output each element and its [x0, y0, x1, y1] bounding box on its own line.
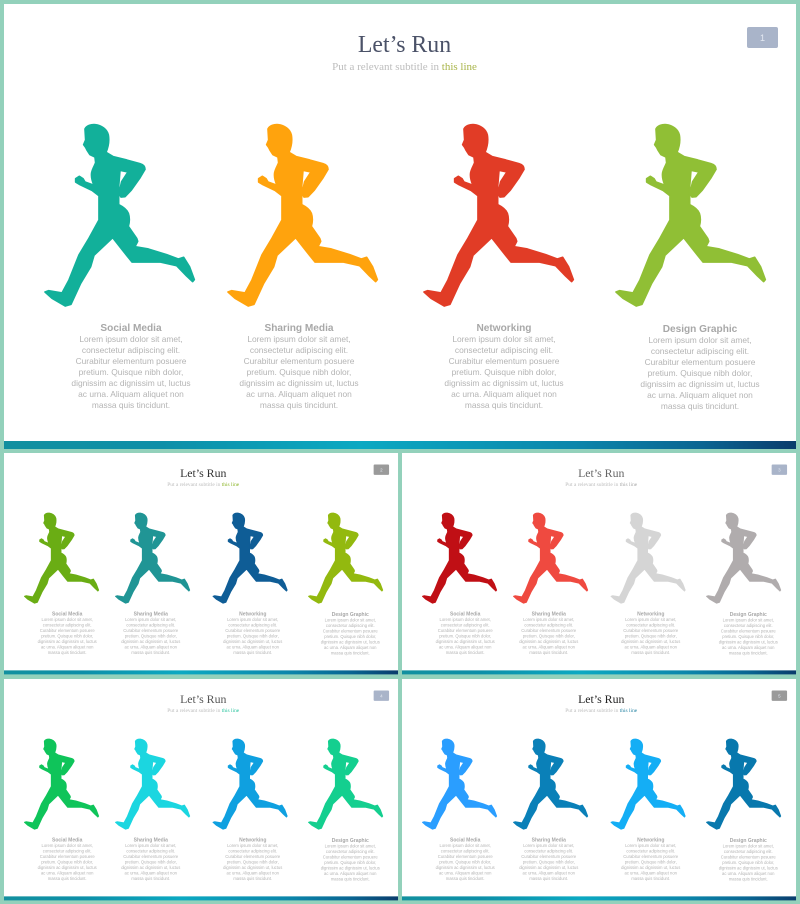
column: design graphic: Curabitur elementum posuere [721, 629, 776, 634]
column: social media: dignissim ac dignissim ut, luctus [436, 865, 495, 870]
column: sharing media: ac urna. Aliquam aliquet non [125, 645, 178, 650]
column: design graphic: Curabitur elementum posuere [323, 855, 378, 860]
column: design graphic: massa quis tincidunt. [661, 401, 739, 411]
column: sharing media: dignissim ac dignissim ut, luctus [519, 639, 578, 644]
column: sharing media: dignissim ac dignissim ut, luctus [121, 865, 180, 870]
column: design graphic: massa quis tincidunt. [729, 876, 768, 881]
column: networking: Lorem ipsum dolor sit amet, [452, 334, 556, 344]
column: networking: pretium. Quisque nibh dolor, [625, 860, 677, 865]
column: sharing media: massa quis tincidunt. [529, 650, 568, 655]
column: networking: consectetur adipiscing elit. [228, 849, 277, 854]
column: social media: massa quis tincidunt. [446, 876, 485, 881]
column: networking: pretium. Quisque nibh dolor, [227, 860, 279, 865]
column: social media: massa quis tincidunt. [92, 400, 170, 410]
column: design graphic: Curabitur elementum posuere [645, 357, 756, 367]
column: social media: Curabitur elementum posuere [438, 628, 493, 633]
column: design graphic: dignissim ac dignissim ut, luctus [719, 640, 778, 645]
column: design graphic: ac urna. Aliquam aliquet non [647, 390, 753, 400]
title: Let’s Run [578, 466, 624, 480]
column: design graphic [706, 739, 781, 881]
column: design graphic: Lorem ipsum dolor sit amet, [648, 335, 752, 345]
column: social media: ac urna. Aliquam aliquet non [41, 871, 94, 876]
column: sharing media: Curabitur elementum posuere [521, 628, 577, 633]
column: social media: ac urna. Aliquam aliquet non [41, 645, 94, 650]
column: networking: Lorem ipsum dolor sit amet, [227, 617, 278, 622]
column: networking: pretium. Quisque nibh dolor, [227, 634, 279, 639]
column: social media [422, 739, 497, 881]
column: networking: dignissim ac dignissim ut, luctus [621, 865, 680, 870]
column: sharing media: consectetur adipiscing elit. [126, 849, 175, 854]
column: social media: ac urna. Aliquam aliquet non [78, 389, 184, 399]
column: networking: dignissim ac dignissim ut, luctus [444, 378, 564, 388]
column: social media: Social Media [100, 323, 162, 334]
subtitle: Put a relevant subtitle in this line [332, 61, 477, 73]
page number badge: 1 [760, 33, 765, 43]
column: social media: ac urna. Aliquam aliquet non [439, 645, 492, 650]
column: social media: Curabitur elementum posuere [76, 356, 187, 366]
column: design graphic: pretium. Quisque nibh dolor, [648, 368, 752, 378]
column: social media [24, 739, 99, 881]
column: networking: Curabitur elementum posuere [449, 356, 560, 366]
column: social media: pretium. Quisque nibh dolor, [439, 634, 491, 639]
column: sharing media: Sharing Media [134, 612, 168, 618]
subtitle: Put a relevant subtitle in this line [167, 708, 240, 714]
column: social media: dignissim ac dignissim ut, luctus [71, 378, 191, 388]
column: networking: Networking [239, 612, 266, 618]
column: sharing media: dignissim ac dignissim ut, luctus [239, 378, 359, 388]
column: social media: consectetur adipiscing elit. [82, 345, 180, 355]
page number badge: 3 [778, 467, 781, 472]
column: design graphic: consectetur adipiscing elit. [651, 346, 749, 356]
column: networking: consectetur adipiscing elit. [455, 345, 553, 355]
column: social media: Social Media [450, 612, 481, 618]
column: design graphic: Design Graphic [332, 612, 369, 618]
column: social media: Lorem ipsum dolor sit amet, [440, 617, 491, 622]
column: design graphic: Design Graphic [730, 838, 767, 844]
column: design graphic: pretium. Quisque nibh dolor, [722, 860, 774, 865]
column: networking: pretium. Quisque nibh dolor, [452, 367, 556, 377]
column: networking: Curabitur elementum posuere [225, 628, 281, 633]
column: design graphic: massa quis tincidunt. [331, 650, 370, 655]
column: sharing media: pretium. Quisque nibh dolor, [125, 860, 177, 865]
column: networking: Networking [239, 838, 266, 844]
column: social media: dignissim ac dignissim ut, luctus [436, 639, 495, 644]
column: social media: pretium. Quisque nibh dolor, [41, 860, 93, 865]
column: sharing media [115, 739, 190, 881]
column: sharing media [513, 739, 588, 881]
column: design graphic: Design Graphic [332, 838, 369, 844]
column: sharing media: Lorem ipsum dolor sit amet, [523, 617, 574, 622]
column: design graphic: consectetur adipiscing elit. [326, 849, 375, 854]
column: social media: Curabitur elementum posuere [40, 854, 95, 859]
column: networking: massa quis tincidunt. [233, 876, 272, 881]
column: sharing media: ac urna. Aliquam aliquet non [523, 645, 576, 650]
column: social media [422, 513, 497, 655]
column: design graphic: pretium. Quisque nibh dolor, [324, 634, 376, 639]
column: sharing media: consectetur adipiscing elit. [524, 623, 573, 628]
column: design graphic: Lorem ipsum dolor sit amet, [723, 844, 774, 849]
column: design graphic: Design Graphic [663, 324, 738, 335]
column: design graphic: consectetur adipiscing elit. [326, 623, 375, 628]
column: sharing media [228, 125, 377, 410]
panel: red and grey variant [402, 453, 796, 674]
column: networking: Curabitur elementum posuere [225, 854, 281, 859]
column: networking [424, 125, 573, 410]
column: design graphic [308, 513, 383, 655]
subtitle: Put a relevant subtitle in this line [565, 482, 638, 488]
column: social media: consectetur adipiscing elit. [441, 623, 490, 628]
page number badge [772, 690, 787, 701]
column: design graphic: Lorem ipsum dolor sit amet, [723, 618, 774, 623]
column: networking [611, 739, 685, 881]
column: social media: massa quis tincidunt. [48, 650, 87, 655]
column: design graphic: Design Graphic [730, 612, 767, 618]
column: sharing media: massa quis tincidunt. [131, 876, 170, 881]
column: sharing media [513, 513, 588, 655]
column: sharing media: Sharing Media [532, 612, 566, 618]
column: design graphic: dignissim ac dignissim ut, luctus [321, 640, 380, 645]
column: networking: ac urna. Aliquam aliquet non [227, 871, 280, 876]
page number badge: 5 [778, 693, 781, 698]
column: networking: Curabitur elementum posuere [623, 628, 679, 633]
column: networking: massa quis tincidunt. [233, 650, 272, 655]
column: social media: Curabitur elementum posuere [40, 628, 95, 633]
column: networking: dignissim ac dignissim ut, luctus [223, 639, 282, 644]
title: Let’s Run [358, 32, 451, 58]
column: sharing media: dignissim ac dignissim ut, luctus [519, 865, 578, 870]
column: networking: massa quis tincidunt. [465, 400, 543, 410]
column: sharing media: ac urna. Aliquam aliquet non [246, 389, 352, 399]
column: design graphic [616, 125, 765, 411]
column: design graphic: consectetur adipiscing elit. [724, 849, 773, 854]
column: networking: ac urna. Aliquam aliquet non [227, 645, 280, 650]
column: sharing media: ac urna. Aliquam aliquet non [523, 871, 576, 876]
column: sharing media: Sharing Media [264, 323, 334, 334]
column: sharing media: pretium. Quisque nibh dolor, [523, 860, 575, 865]
column: design graphic: massa quis tincidunt. [729, 650, 768, 655]
column: social media: Lorem ipsum dolor sit amet, [440, 843, 491, 848]
column: networking: pretium. Quisque nibh dolor, [625, 634, 677, 639]
column: design graphic: Curabitur elementum posuere [721, 855, 776, 860]
subtitle: Put a relevant subtitle in this line [565, 708, 638, 714]
column: networking: Lorem ipsum dolor sit amet, [625, 843, 676, 848]
column: design graphic: Lorem ipsum dolor sit amet, [325, 844, 376, 849]
column: networking: ac urna. Aliquam aliquet non [625, 871, 678, 876]
column: social media: massa quis tincidunt. [48, 876, 87, 881]
column: sharing media: pretium. Quisque nibh dolor, [247, 367, 351, 377]
column: networking: dignissim ac dignissim ut, luctus [223, 865, 282, 870]
column: social media: ac urna. Aliquam aliquet non [439, 871, 492, 876]
panel: blue variant [402, 679, 796, 900]
column: sharing media: consectetur adipiscing elit. [250, 345, 348, 355]
column: social media [24, 513, 99, 655]
column: design graphic: consectetur adipiscing elit. [724, 623, 773, 628]
column: networking: consectetur adipiscing elit. [626, 623, 675, 628]
column: design graphic: pretium. Quisque nibh dolor, [324, 860, 376, 865]
column: sharing media: ac urna. Aliquam aliquet non [125, 871, 178, 876]
column: sharing media [115, 513, 190, 655]
column: social media: pretium. Quisque nibh dolor, [79, 367, 183, 377]
column: social media [45, 125, 194, 410]
page number badge: 4 [380, 693, 383, 698]
title: Let’s Run [180, 692, 226, 706]
column: sharing media: pretium. Quisque nibh dolor, [523, 634, 575, 639]
column: sharing media: massa quis tincidunt. [260, 400, 338, 410]
column: networking: Networking [637, 838, 664, 844]
panel: green and blue variant [4, 453, 398, 674]
column: design graphic: massa quis tincidunt. [331, 876, 370, 881]
column: networking: Networking [477, 323, 531, 334]
column: sharing media: consectetur adipiscing elit. [524, 849, 573, 854]
column: social media: Curabitur elementum posuere [438, 854, 493, 859]
column: sharing media: dignissim ac dignissim ut, luctus [121, 639, 180, 644]
column: social media: dignissim ac dignissim ut, luctus [38, 865, 97, 870]
column: social media: Social Media [52, 612, 83, 618]
title: Let’s Run [578, 692, 624, 706]
column: sharing media: Lorem ipsum dolor sit amet, [523, 843, 574, 848]
title: Let’s Run [180, 466, 226, 480]
column: sharing media: Curabitur elementum posuere [521, 854, 577, 859]
column: networking: Curabitur elementum posuere [623, 854, 679, 859]
column: social media: pretium. Quisque nibh dolor, [439, 860, 491, 865]
column: social media: pretium. Quisque nibh dolor, [41, 634, 93, 639]
column: sharing media: massa quis tincidunt. [529, 876, 568, 881]
column: design graphic: pretium. Quisque nibh dolor, [722, 634, 774, 639]
column: design graphic: ac urna. Aliquam aliquet non [722, 871, 775, 876]
column: social media: Social Media [450, 838, 481, 844]
column: networking: Lorem ipsum dolor sit amet, [227, 843, 278, 848]
column: networking: ac urna. Aliquam aliquet non [625, 645, 678, 650]
column: design graphic: ac urna. Aliquam aliquet non [722, 645, 775, 650]
column: sharing media: Curabitur elementum posuere [244, 356, 355, 366]
column: sharing media: Sharing Media [134, 838, 168, 844]
column: design graphic: ac urna. Aliquam aliquet non [324, 871, 377, 876]
page number badge [772, 464, 787, 475]
column: design graphic [706, 513, 781, 655]
column: networking: Lorem ipsum dolor sit amet, [625, 617, 676, 622]
column: sharing media: Lorem ipsum dolor sit amet, [125, 617, 176, 622]
column: networking: Networking [637, 612, 664, 618]
page number badge: 2 [380, 467, 383, 472]
column: social media: Lorem ipsum dolor sit amet, [79, 334, 183, 344]
panel: main slide [4, 4, 796, 449]
column: networking: consectetur adipiscing elit. [228, 623, 277, 628]
column: sharing media: massa quis tincidunt. [131, 650, 170, 655]
column: networking: ac urna. Aliquam aliquet non [451, 389, 557, 399]
column: sharing media: pretium. Quisque nibh dolor, [125, 634, 177, 639]
column: social media: Lorem ipsum dolor sit amet, [42, 617, 93, 622]
column: sharing media: Lorem ipsum dolor sit amet, [125, 843, 176, 848]
page number badge [374, 690, 389, 701]
subtitle: Put a relevant subtitle in this line [167, 482, 240, 488]
column: sharing media: Curabitur elementum posuere [123, 628, 179, 633]
column: design graphic: dignissim ac dignissim ut, luctus [640, 379, 760, 389]
column: networking [611, 513, 685, 655]
column: social media: consectetur adipiscing elit. [441, 849, 490, 854]
column: design graphic: ac urna. Aliquam aliquet non [324, 645, 377, 650]
column: social media: consectetur adipiscing elit. [43, 849, 92, 854]
column: networking: consectetur adipiscing elit. [626, 849, 675, 854]
column: design graphic: Curabitur elementum posuere [323, 629, 378, 634]
column: sharing media: Curabitur elementum posuere [123, 854, 179, 859]
column: sharing media: Sharing Media [532, 838, 566, 844]
column: networking [213, 513, 287, 655]
column: sharing media: consectetur adipiscing elit. [126, 623, 175, 628]
column: social media: Social Media [52, 838, 83, 844]
page number badge [374, 464, 389, 475]
column: social media: consectetur adipiscing elit. [43, 623, 92, 628]
column: social media: Lorem ipsum dolor sit amet, [42, 843, 93, 848]
column: social media: massa quis tincidunt. [446, 650, 485, 655]
column: social media: dignissim ac dignissim ut, luctus [38, 639, 97, 644]
column: sharing media: Lorem ipsum dolor sit amet, [247, 334, 351, 344]
column: design graphic [308, 739, 383, 881]
panel: green and cyan variant [4, 679, 398, 900]
column: design graphic: dignissim ac dignissim ut, luctus [719, 866, 778, 871]
column: networking: dignissim ac dignissim ut, luctus [621, 639, 680, 644]
column: networking: massa quis tincidunt. [631, 650, 670, 655]
page number badge [747, 27, 778, 48]
column: networking [213, 739, 287, 881]
column: design graphic: dignissim ac dignissim ut, luctus [321, 866, 380, 871]
column: design graphic: Lorem ipsum dolor sit amet, [325, 618, 376, 623]
column: networking: massa quis tincidunt. [631, 876, 670, 881]
